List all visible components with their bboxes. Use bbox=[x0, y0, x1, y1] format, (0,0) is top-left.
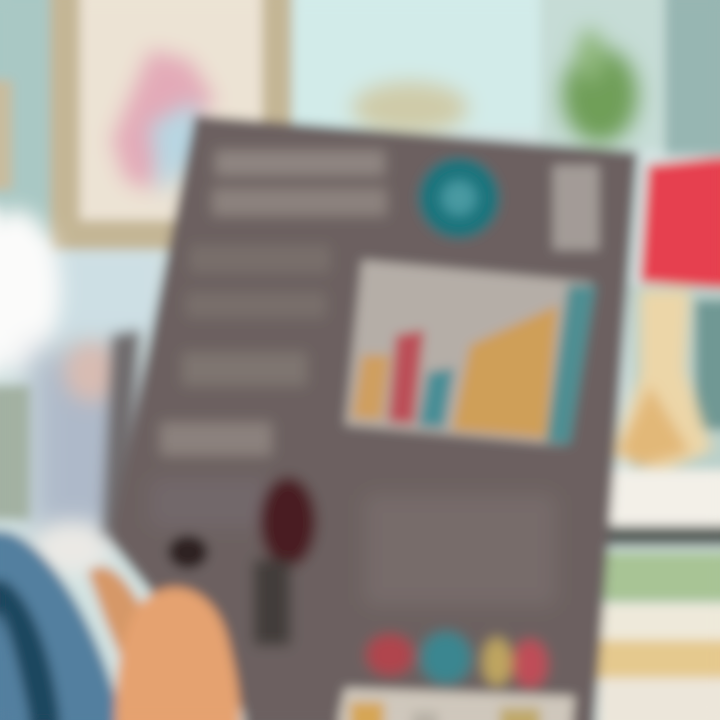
blue shirt sleeve bbox=[0, 530, 122, 720]
stack of books bbox=[590, 470, 720, 720]
colored dots row bbox=[366, 631, 548, 689]
chart background bbox=[345, 260, 592, 445]
lamp shade bbox=[640, 157, 720, 288]
bar: orange large bbox=[452, 305, 558, 438]
blurred person at left bbox=[0, 342, 130, 574]
white highlight at left bbox=[0, 210, 60, 370]
left subheading bbox=[160, 422, 272, 456]
document shadow behind bbox=[102, 330, 140, 540]
infographic document bbox=[110, 115, 638, 720]
bar chart panel bbox=[345, 260, 596, 445]
lower right text block bbox=[365, 495, 555, 605]
header side stripes bbox=[553, 165, 599, 250]
lamp base bbox=[612, 290, 712, 474]
left text block bbox=[182, 245, 330, 386]
plant bbox=[562, 29, 638, 143]
vase behind document bbox=[352, 82, 468, 134]
document sheet bbox=[110, 115, 638, 720]
left lower text bbox=[150, 478, 270, 528]
teal circular badge bbox=[418, 157, 500, 239]
bar: orange small bbox=[352, 355, 390, 420]
document title block bbox=[212, 150, 387, 216]
bar: teal bbox=[418, 368, 454, 428]
bar: teal side bbox=[546, 285, 596, 445]
bottom mini chart bbox=[338, 688, 575, 720]
dark red marker and thumb shadow bbox=[254, 478, 315, 645]
picture frame bbox=[0, 0, 292, 250]
dark spot on document bbox=[168, 535, 208, 569]
bar: red bbox=[388, 330, 424, 424]
hand bbox=[88, 566, 240, 720]
